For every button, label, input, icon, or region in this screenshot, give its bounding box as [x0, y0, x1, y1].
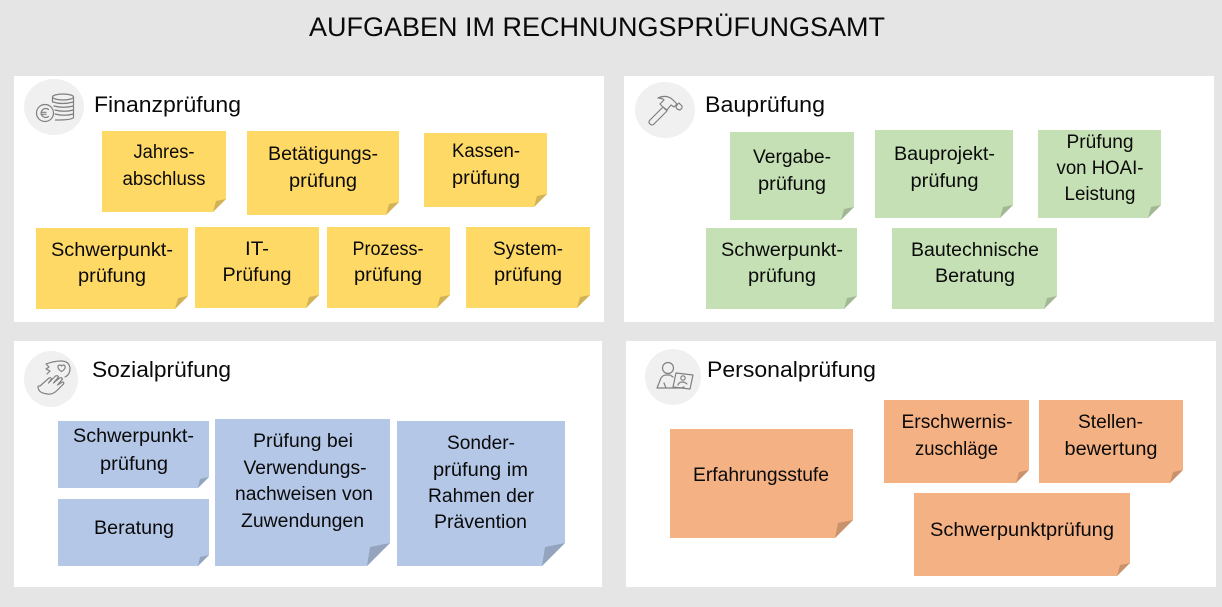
note: Schwerpunktprüfung — [914, 493, 1130, 576]
note: Prüfung bei Verwendungsnachweisen von Zuwendungen: Zuwendungen — [241, 511, 364, 532]
note: Sonderprüfung im Rahmen der Prävention — [397, 421, 565, 566]
note: Prüfung von HOAI-Leistung: Leistung — [1064, 184, 1136, 205]
panel: Bauprüfung — [624, 76, 1214, 322]
note: Bautechnische Beratung — [892, 228, 1057, 309]
note: Schwerpunktprüfung — [706, 228, 857, 309]
note: IT-Prüfung — [195, 227, 319, 308]
note: Systemprüfung: System- — [493, 239, 563, 260]
note: Schwerpunktprüfung — [58, 421, 209, 488]
note: Schwerpunktprüfung: prüfung — [748, 266, 816, 287]
note: Prüfung von HOAI-Leistung: Prüfung — [1066, 132, 1134, 153]
note: Bautechnische Beratung: Bautechnische — [911, 240, 1039, 261]
heading: Sozialprüfung: Sozialprüfung — [92, 357, 231, 382]
title: AUFGABEN IM RECHNUNGSPRÜFUNGSAMT — [309, 12, 885, 42]
note: Beratung — [58, 499, 209, 566]
note: Stellenbewertung — [1039, 400, 1183, 483]
note: Schwerpunktprüfung — [36, 228, 188, 309]
panel: Finanzprüfung — [14, 76, 604, 322]
note: Kassenprüfung: Kassen- — [452, 141, 520, 162]
heading: Bauprüfung: Bauprüfung — [705, 92, 825, 117]
note: Erschwerniszuschläge — [884, 400, 1029, 483]
note: Betätigungsprüfung: prüfung — [289, 171, 357, 192]
note: IT-Prüfung: Prüfung — [222, 265, 292, 286]
note: Kassenprüfung — [424, 133, 547, 207]
note: Jahresabschluss — [102, 131, 226, 212]
note: Jahresabschluss: Jahres- — [134, 142, 194, 163]
note: Systemprüfung: prüfung — [494, 265, 562, 286]
note: Kassenprüfung: prüfung — [452, 168, 520, 189]
note: Vergabeprüfung: Vergabe- — [753, 147, 831, 168]
note: Sonderprüfung im Rahmen der Prävention: Sonder- — [447, 433, 515, 454]
note: Erfahrungsstufe — [670, 429, 853, 538]
note: Bauprojektprüfung: Bauprojekt- — [894, 144, 995, 165]
note: Erschwerniszuschläge: Erschwernis- — [902, 412, 1012, 433]
note: Stellenbewertung: bewertung — [1064, 439, 1158, 460]
note: Vergabeprüfung: prüfung — [758, 174, 826, 195]
note: Jahresabschluss: abschluss — [122, 169, 206, 190]
note: Prüfung von HOAI-Leistung — [1038, 130, 1161, 218]
note: Sonderprüfung im Rahmen der Prävention: Rahmen der — [428, 486, 535, 507]
note: Betätigungsprüfung — [247, 131, 399, 215]
note: Stellenbewertung: Stellen- — [1078, 412, 1143, 433]
note: Prüfung von HOAI-Leistung: von HOAI- — [1056, 158, 1144, 179]
note: Erschwerniszuschläge: zuschläge — [915, 439, 998, 460]
heading: Finanzprüfung: Finanzprüfung — [94, 92, 241, 117]
note: Sonderprüfung im Rahmen der Prävention: prüfung im — [433, 460, 528, 481]
icon: coins — [24, 79, 84, 135]
note: Prüfung bei Verwendungsnachweisen von Zuwendungen: Verwendungs- — [244, 458, 366, 479]
note: Prozessprüfung: prüfung — [354, 265, 422, 286]
note: IT-Prüfung: IT- — [245, 239, 269, 260]
note: Betätigungsprüfung: Betätigungs- — [268, 144, 378, 165]
heading: Personalprüfung: Personalprüfung — [707, 357, 876, 382]
note: Schwerpunktprüfung: Schwerpunktprüfung — [930, 520, 1114, 541]
note: Schwerpunktprüfung: prüfung — [100, 454, 168, 475]
icon: hammer — [635, 82, 695, 138]
note: Beratung: Beratung — [94, 518, 174, 539]
note: Schwerpunktprüfung: Schwerpunkt- — [51, 240, 173, 261]
note: Vergabeprüfung — [730, 132, 854, 220]
note: Prozessprüfung — [327, 227, 450, 308]
icon: person at laptop — [645, 349, 701, 405]
note: Prüfung bei Verwendungsnachweisen von Zuwendungen: nachweisen von — [235, 484, 373, 505]
note: Systemprüfung — [466, 227, 590, 308]
note: Bauprojektprüfung: prüfung — [910, 171, 978, 192]
note: Schwerpunktprüfung: Schwerpunkt- — [721, 240, 843, 261]
note: Schwerpunktprüfung: prüfung — [78, 266, 146, 287]
note: Sonderprüfung im Rahmen der Prävention: Prävention — [434, 512, 527, 533]
panel: Personalprüfung — [626, 341, 1216, 587]
note: Bauprojektprüfung — [875, 130, 1013, 218]
note: Erfahrungsstufe: Erfahrungsstufe — [693, 465, 829, 486]
panel: Sozialprüfung — [14, 341, 602, 587]
note: Bautechnische Beratung: Beratung — [935, 266, 1015, 287]
icon: hand with heart — [24, 351, 78, 407]
note: Schwerpunktprüfung: Schwerpunkt- — [73, 426, 194, 447]
note: Prozessprüfung: Prozess- — [352, 239, 424, 260]
note: Prüfung bei Verwendungsnachweisen von Zuwendungen — [215, 419, 390, 566]
note: Prüfung bei Verwendungsnachweisen von Zuwendungen: Prüfung bei — [253, 431, 353, 452]
